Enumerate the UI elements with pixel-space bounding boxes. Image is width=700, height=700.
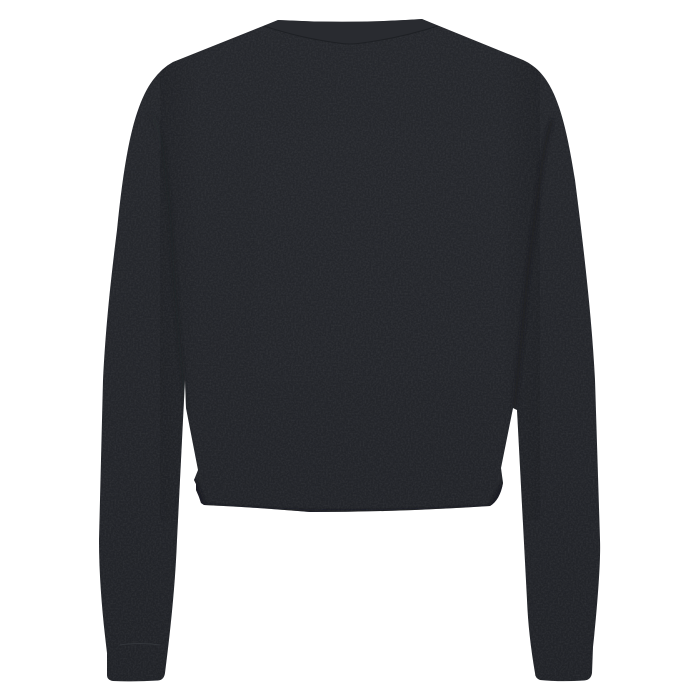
left sleeve seam [184, 382, 186, 406]
neck rib collar [264, 19, 438, 44]
right sleeve seam [514, 120, 552, 410]
fabric details, folds and seams [90, 10, 610, 690]
illustration: cropped long-sleeve sweatshirt, back view [99, 19, 600, 682]
frayed hem shadow [194, 480, 506, 513]
sweatshirt silhouette [90, 10, 610, 690]
left shoulder highlight [150, 115, 160, 150]
garment base fabric [99, 19, 600, 681]
left cuff seam [120, 644, 160, 645]
body edge shading [160, 60, 540, 520]
knit texture [90, 10, 610, 690]
